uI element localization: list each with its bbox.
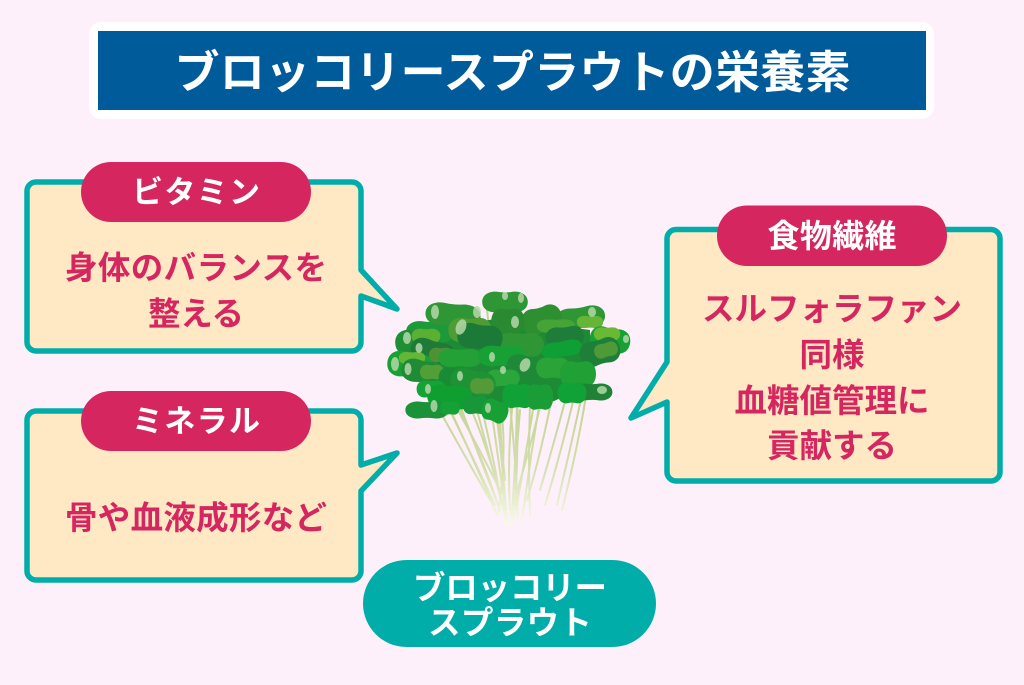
vitamin heading: ビタミン [132,175,260,210]
panel: minerals [27,391,397,580]
title text: ブロッコリースプラウトの栄養素 [174,47,850,98]
vitamin text: 身体のバランスを [65,250,327,286]
sprout stems [420,300,596,525]
panel: vitamin [27,162,397,351]
minerals text: 骨や血液成形など [65,500,327,536]
vitamin text: 整える [148,296,244,332]
leaf highlights [391,292,629,413]
fiber text: スルフォラファン [702,291,962,327]
fiber text: 血糖値管理に [734,383,930,419]
illustration: broccoli sprout [386,292,632,525]
label: broccoli sprout [363,560,656,647]
minerals heading: ミネラル [132,404,260,439]
panel: dietary fiber [631,206,1000,481]
label: broccoli sprout: スプラウト [428,605,592,641]
title banner [89,22,934,119]
fiber text: 同様 [800,337,864,373]
label: broccoli sprout: ブロッコリー [413,569,607,606]
leaf mass backing [430,318,590,405]
fiber heading: 食物繊維 [768,218,896,254]
fiber text: 貢献する [767,428,897,464]
sprout leaves [386,292,632,426]
